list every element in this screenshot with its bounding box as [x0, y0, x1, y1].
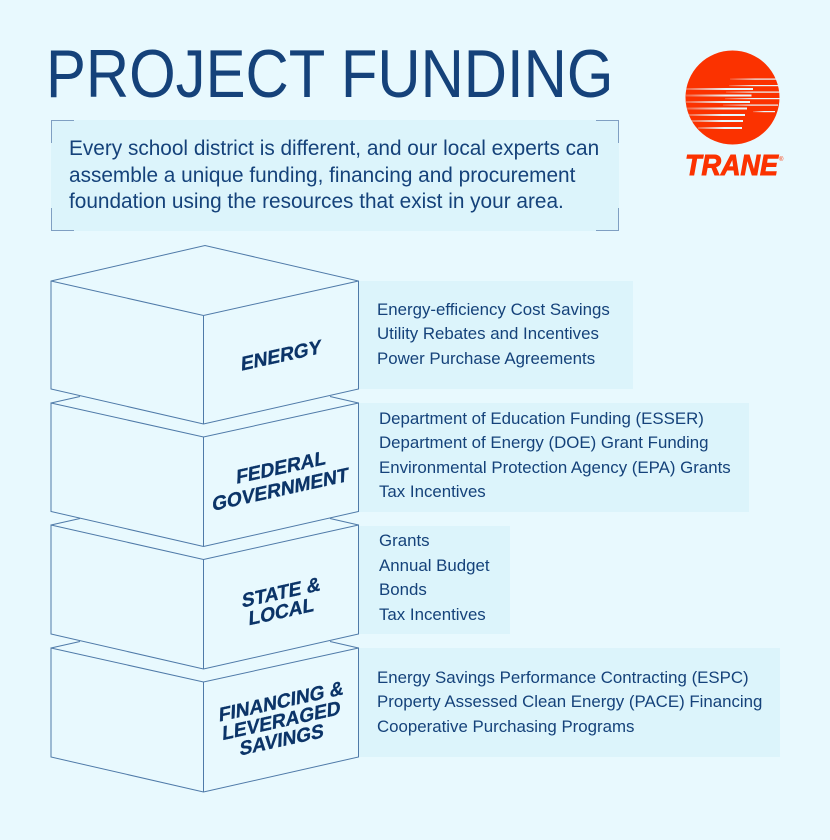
info panel: financing — [359, 648, 780, 757]
intro text: Every school district is different, and our local experts can — [69, 137, 599, 160]
title: PROJECT FUNDING — [46, 36, 613, 112]
energy list: Energy-efficiency Cost Savings — [377, 300, 610, 318]
federal list — [379, 408, 731, 501]
label: federal government — [212, 442, 350, 516]
financing list: Cooperative Purchasing Programs — [377, 716, 634, 736]
label: financing and leveraged savings: LEVERAGED — [222, 697, 341, 745]
state list: Annual Budget — [379, 556, 490, 574]
state list: Tax Incentives — [379, 604, 486, 624]
financing list — [377, 668, 762, 736]
label: financing and leveraged savings — [217, 677, 344, 766]
energy list: Utility Rebates and Incentives — [377, 324, 599, 343]
label: state and local: LOCAL — [248, 594, 315, 630]
box 4: financing — [51, 642, 358, 792]
energy list: Power Purchase Agreements — [377, 348, 595, 368]
intro text: assemble a unique funding, financing and procurement — [69, 164, 575, 187]
energy list — [377, 300, 610, 368]
label: financing and leveraged savings: SAVINGS — [239, 720, 324, 761]
label: federal government: GOVERNMENT — [212, 464, 349, 516]
label: financing and leveraged savings: FINANCING & — [219, 677, 344, 727]
info panel: energy — [359, 281, 633, 389]
logo: Trane — [685, 50, 784, 182]
federal list: Environmental Protection Agency (EPA) Grants — [379, 458, 731, 476]
box 3: state and local — [51, 518, 358, 669]
intro text panel — [51, 120, 619, 231]
intro corner brackets — [52, 120, 618, 230]
financing list: Energy Savings Performance Contracting (ESPC) — [377, 668, 749, 686]
info panel: federal government — [359, 403, 749, 512]
logo: Trane: TRANE — [685, 150, 780, 182]
box 1: energy — [51, 246, 358, 424]
label: state and local: STATE & — [242, 573, 321, 613]
label: state and local — [241, 573, 321, 632]
financing list: Property Assessed Clean Energy (PACE) Financing — [377, 692, 762, 711]
federal list: Tax Incentives — [379, 482, 486, 501]
state list: Bonds — [379, 580, 427, 599]
intro text: foundation using the resources that exist in your area. — [69, 190, 564, 213]
state list: Grants — [379, 531, 430, 550]
box 2: federal government — [51, 396, 358, 546]
info panel: state and local — [359, 526, 510, 634]
intro text — [69, 137, 599, 213]
label: energy: ENERGY — [241, 336, 322, 376]
state list — [379, 531, 490, 624]
label: federal government: FEDERAL — [236, 447, 327, 489]
federal list: Department of Education Funding (ESSER) — [379, 408, 704, 428]
federal list: Department of Energy (DOE) Grant Funding — [379, 433, 709, 452]
logo: Trane: ® — [779, 156, 784, 163]
